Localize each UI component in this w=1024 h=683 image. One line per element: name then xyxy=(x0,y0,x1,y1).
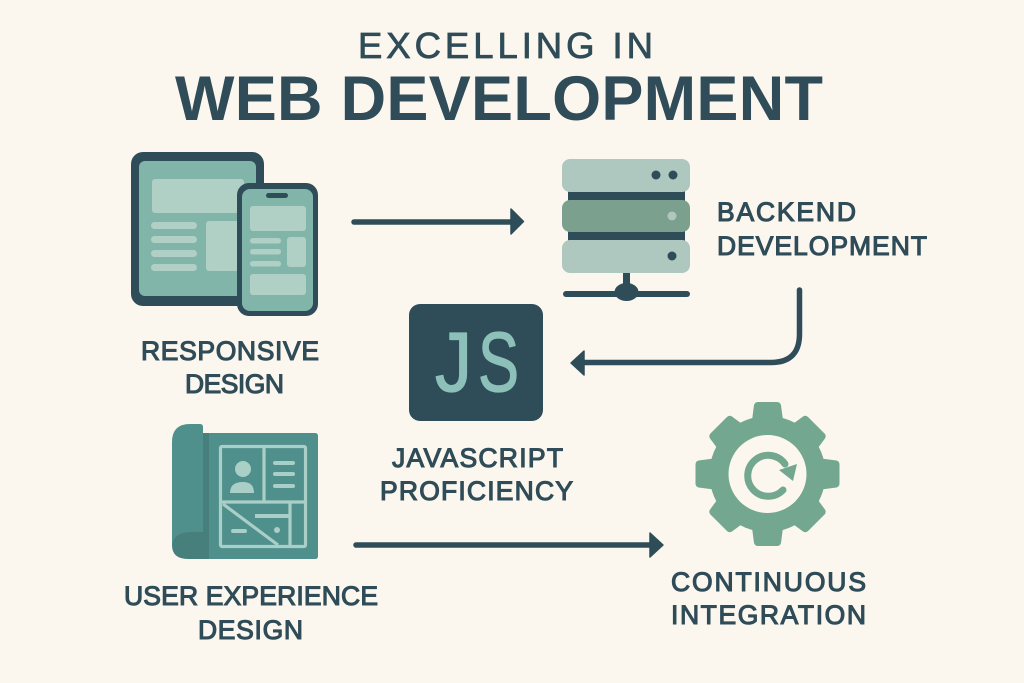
title line 1: EXCELLING IN xyxy=(358,25,653,66)
label: continuous integration: CONTINUOUS xyxy=(671,567,866,597)
phone xyxy=(237,183,318,316)
label: javascript proficiency: JAVASCRIPT xyxy=(392,443,563,473)
icon: server xyxy=(562,159,690,301)
badge letters xyxy=(435,315,519,409)
icon: responsive devices xyxy=(131,152,318,316)
wireframe xyxy=(220,446,306,546)
arrow: user experience to continuous integration xyxy=(356,533,663,557)
arrow: responsive design to backend xyxy=(354,209,524,234)
arrow: backend to javascript xyxy=(571,290,800,375)
label: continuous integration: INTEGRATION xyxy=(671,600,866,630)
label: javascript proficiency xyxy=(380,443,573,506)
label: responsive design: RESPONSIVE xyxy=(141,336,319,366)
badge letters: J xyxy=(435,315,472,409)
label: user experience design: USER EXPERIENCE xyxy=(124,581,378,611)
title xyxy=(175,25,823,134)
icon: blueprint map xyxy=(172,424,318,559)
label: backend development: BACKEND xyxy=(717,197,856,227)
icon: gear with refresh xyxy=(696,402,840,546)
label: backend development xyxy=(717,197,927,261)
icon: javascript badge xyxy=(409,304,543,421)
tablet xyxy=(131,152,264,306)
badge letters: S xyxy=(478,315,519,409)
label: user experience design xyxy=(124,581,378,645)
label: continuous integration xyxy=(671,567,866,630)
label: user experience design: DESIGN xyxy=(198,615,303,645)
label: javascript proficiency: PROFICIENCY xyxy=(380,476,573,506)
label: responsive design xyxy=(141,336,319,399)
title line 2: WEB DEVELOPMENT xyxy=(175,64,823,134)
label: responsive design: DESIGN xyxy=(185,369,284,399)
label: backend development: DEVELOPMENT xyxy=(717,231,927,261)
